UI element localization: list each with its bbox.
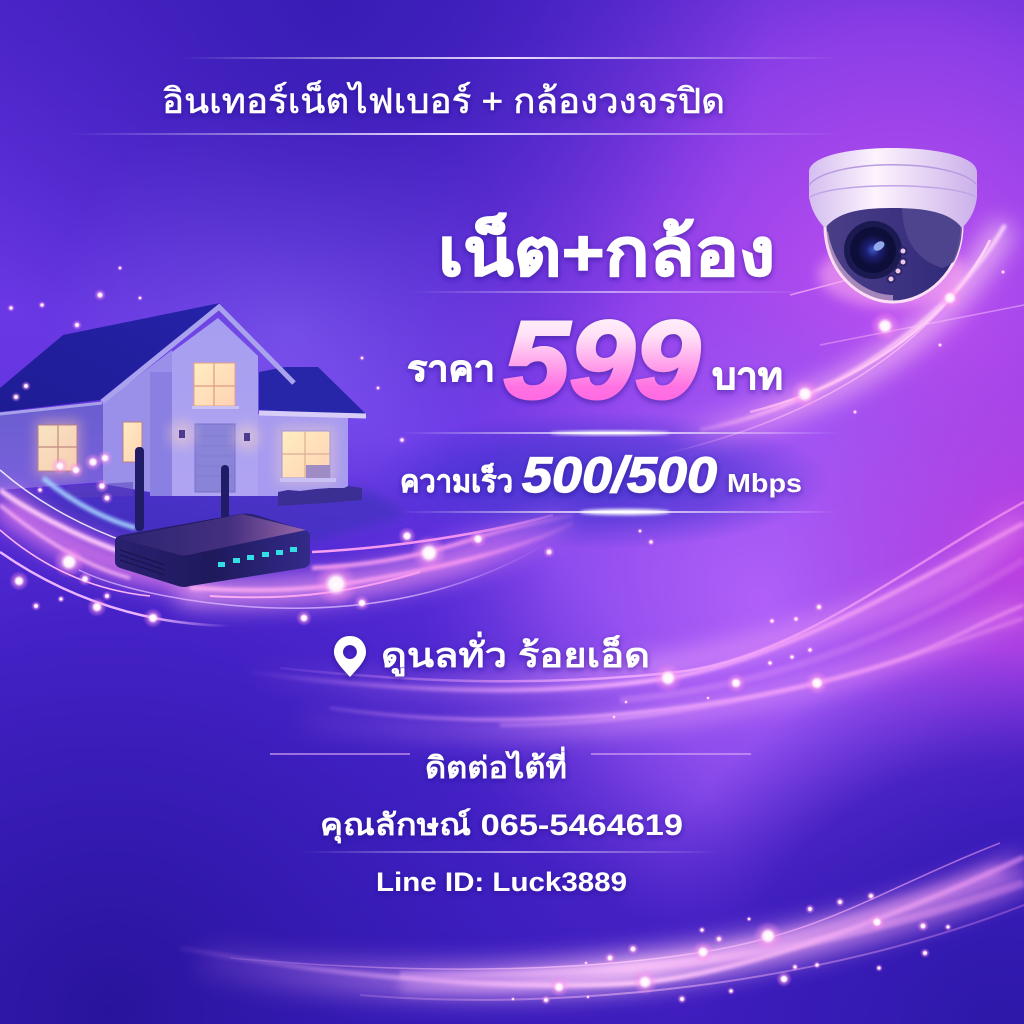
divider <box>300 851 720 853</box>
headline: เน็ต+กล้อง <box>438 212 775 289</box>
lens <box>844 221 902 279</box>
speed number: 500/500 <box>522 447 717 503</box>
housing <box>809 148 977 228</box>
title: อินเทอร์เน็ตไฟเบอร์ + กล้องวงจรปิด <box>162 80 725 121</box>
currency: บาท <box>712 356 783 398</box>
price label: ราคา <box>407 348 495 389</box>
roof left <box>0 303 220 412</box>
contact dividers <box>270 753 751 755</box>
divider <box>400 431 840 435</box>
light stream: middle band <box>250 502 1024 729</box>
lawn shadow <box>0 490 410 545</box>
price number: 599 <box>504 299 700 422</box>
left wing wall <box>0 403 103 490</box>
hedge <box>278 486 362 506</box>
speed unit: Mbps <box>727 468 802 498</box>
light stream: left swoosh through router <box>0 470 573 626</box>
antennas <box>135 447 144 531</box>
light stream: bottom band <box>180 843 1024 1000</box>
coverage area <box>334 631 650 677</box>
roof right <box>259 367 367 415</box>
sparkles <box>7 265 1006 1005</box>
middle wall <box>103 350 172 496</box>
speed label: ความเร็ว <box>400 462 513 499</box>
right wing wall <box>258 414 348 496</box>
lens dome <box>825 200 962 302</box>
light stream: rising right swoosh <box>660 225 1024 455</box>
line id: Line ID: Luck3889 <box>376 867 627 897</box>
router <box>115 447 310 587</box>
price row <box>407 299 783 422</box>
contact block <box>270 746 751 897</box>
dome inner band <box>825 205 970 298</box>
left hedge <box>67 482 133 498</box>
front gable wall <box>172 318 258 496</box>
divider <box>400 509 840 515</box>
contact heading: ดิตต่อไต้ที่ <box>425 746 567 785</box>
IR LEDs <box>888 248 906 282</box>
dome glow <box>818 243 968 307</box>
LED lights <box>218 547 297 567</box>
divider <box>410 291 810 293</box>
door <box>195 424 235 492</box>
CCTV dome camera <box>809 148 977 307</box>
windows <box>36 363 336 484</box>
wall lamps <box>169 421 260 450</box>
top <box>118 514 306 555</box>
contact name and phone: คุณลักษณ์ 065-5464619 <box>320 808 683 844</box>
icon: location pin <box>334 636 366 677</box>
body <box>115 514 310 587</box>
coverage text: ดูนลทั่ว ร้อยเอ็ด <box>381 631 650 677</box>
house <box>0 303 410 545</box>
speed row <box>400 447 802 503</box>
fascia <box>102 307 294 402</box>
